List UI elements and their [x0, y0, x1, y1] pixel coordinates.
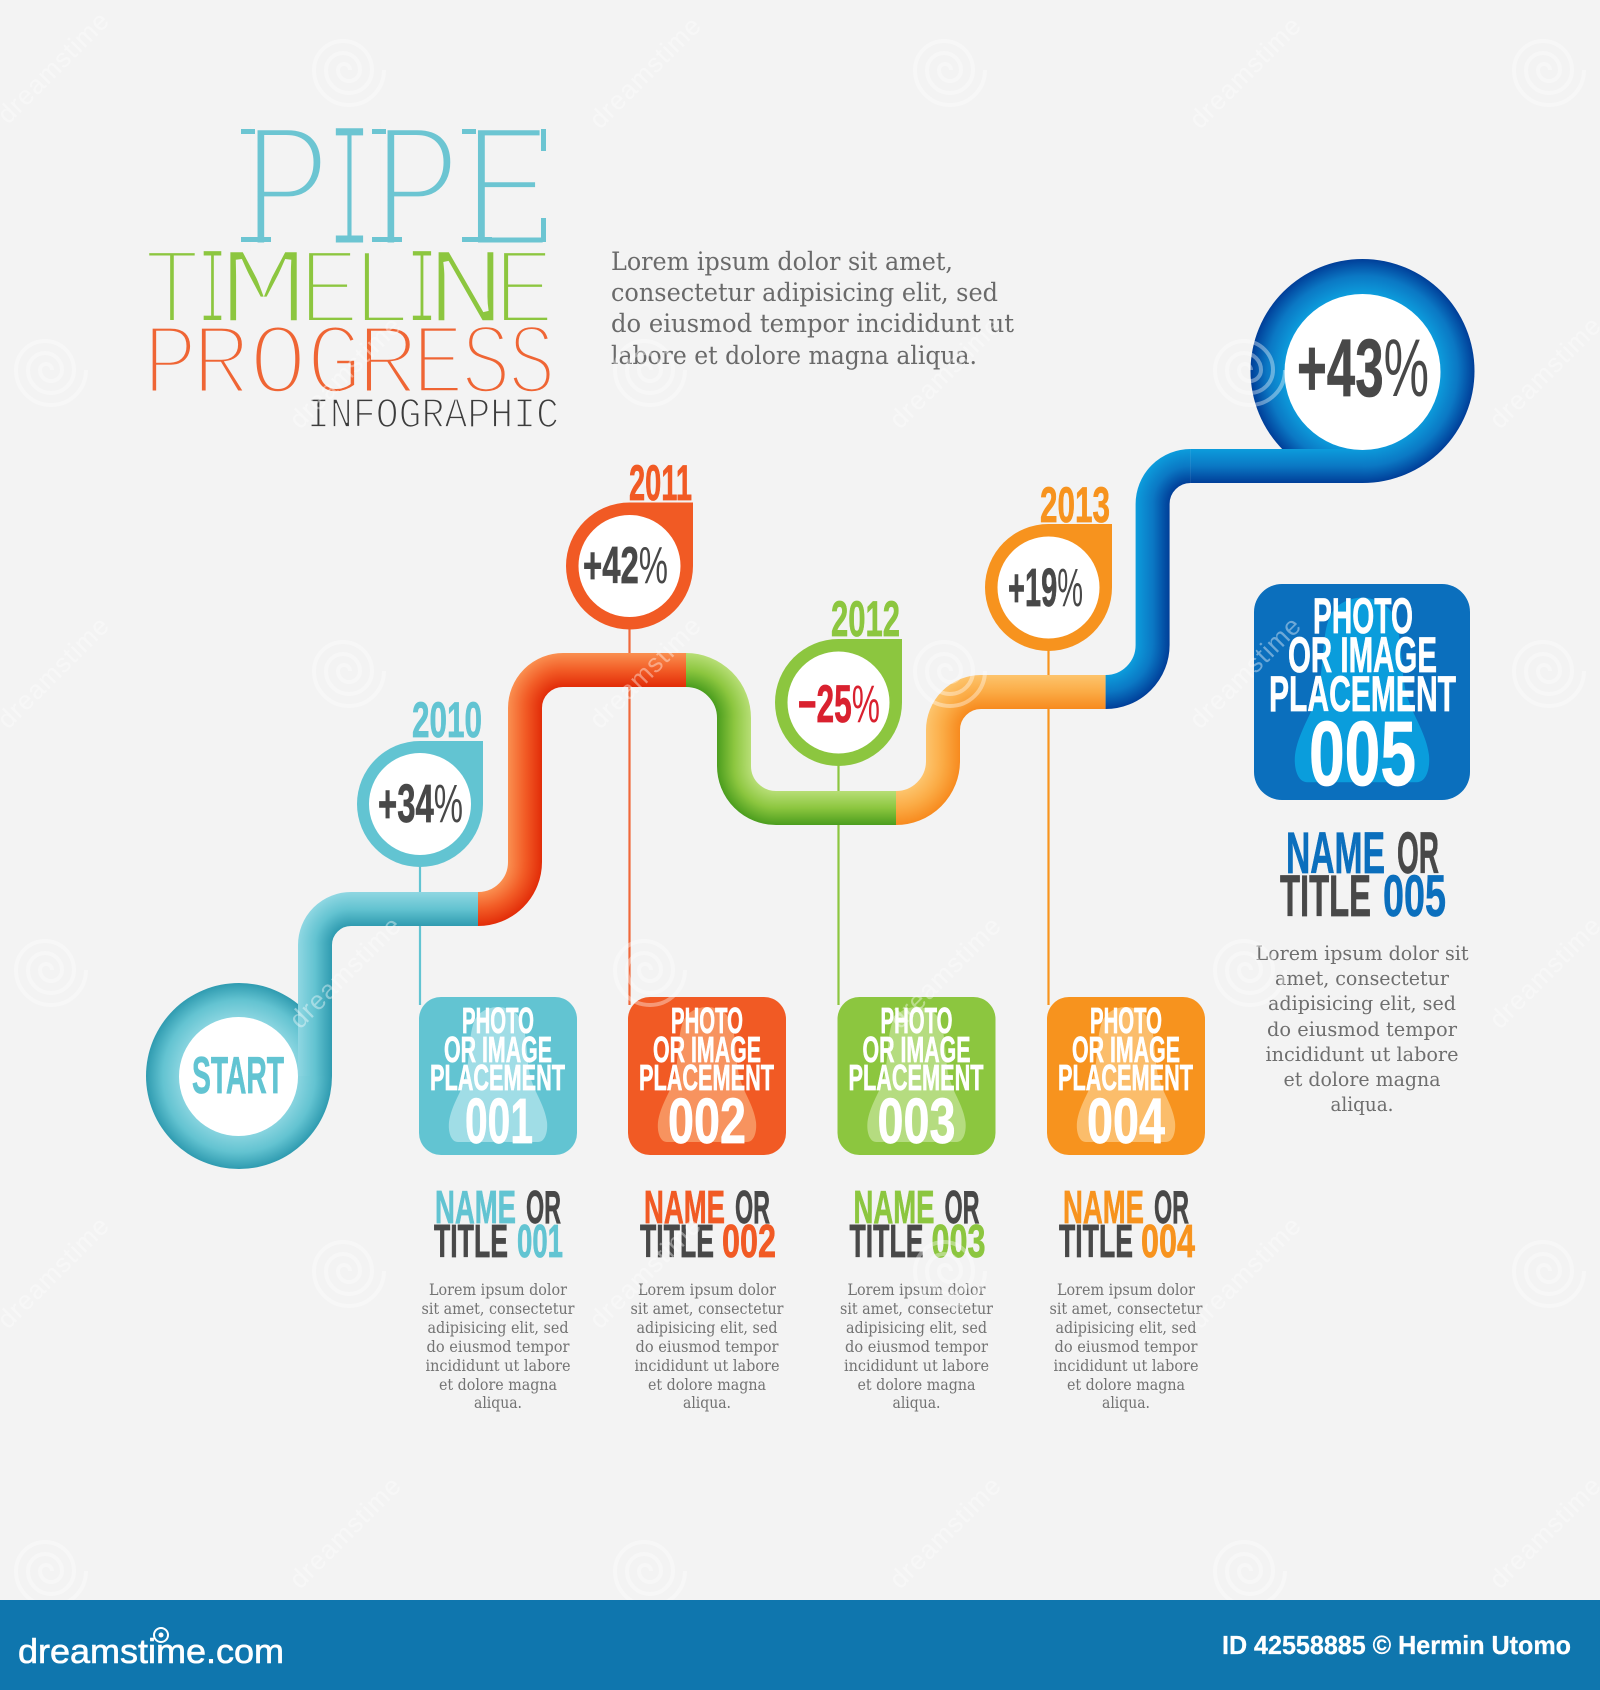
- title: PROGRESS: G: [306, 308, 363, 424]
- card 005 body text: incididunt ut labore: [1266, 1042, 1458, 1066]
- title: PROGRESS: E: [412, 308, 464, 424]
- card 004 body text: adipisicing elit, sed: [1056, 1319, 1197, 1337]
- watermark wordmarks: dreamstime: [1183, 610, 1307, 734]
- card 001: PHOTO: [462, 1000, 534, 1041]
- card 005: OR IMAGE: [1288, 627, 1437, 683]
- title: TIMELINE: N: [425, 232, 507, 356]
- card 002 body text: do eiusmod tempor: [636, 1338, 779, 1356]
- card 003: PHOTO: [880, 1000, 952, 1041]
- marker: 2010 +34%: [357, 692, 483, 867]
- title: TIMELINE: [143, 231, 556, 357]
- title: INFOGRAPHIC: INFOGRAPHIC: [307, 391, 559, 440]
- title: TIMELINE: I: [407, 231, 437, 356]
- card 001 title: [434, 1181, 563, 1267]
- marker: 2011 +42%: [566, 455, 693, 630]
- card 004 body text: do eiusmod tempor: [1054, 1338, 1198, 1356]
- card 003 title: 003: [932, 1215, 986, 1267]
- pipe: orange segment: [896, 675, 1106, 808]
- title: TIMELINE: L: [350, 232, 412, 357]
- card 002 title: TITLE: [640, 1215, 714, 1267]
- card 002 body text: adipisicing elit, sed: [636, 1319, 778, 1337]
- card 004 body text: Lorem ipsum dolor: [1057, 1281, 1196, 1299]
- title: PIPE: [241, 94, 554, 303]
- card 005 body text: amet, consectetur: [1275, 966, 1449, 990]
- pipe: red segment: [478, 653, 686, 909]
- title: PROGRESS: R: [356, 308, 418, 424]
- title: PROGRESS: [143, 308, 556, 424]
- card 003 body text: [840, 1281, 994, 1412]
- card 002 title: [640, 1181, 776, 1267]
- pipe: green segment: [686, 670, 896, 825]
- title: PIPE: P: [372, 95, 462, 303]
- watermark wordmarks: dreamstime: [283, 310, 407, 434]
- card 004 body text: sit amet, consectetur: [1050, 1300, 1203, 1318]
- footer credit: ID 42558885 © Hermin Utomo: [1222, 1630, 1571, 1660]
- marker: 2011 +42%: 2011: [629, 455, 692, 511]
- card 004: 004: [1087, 1085, 1165, 1157]
- card 005 body text: do eiusmod tempor: [1267, 1017, 1457, 1041]
- card 004: PLACEMENT: [1058, 1057, 1193, 1098]
- intro text block: do eiusmod tempor incididunt ut: [611, 309, 1014, 338]
- card 005: PLACEMENT: [1269, 666, 1456, 722]
- end node centre: +43%: [1284, 294, 1440, 450]
- card 001 title: 001: [517, 1215, 563, 1267]
- card 005 body text: [1256, 941, 1468, 1116]
- card 002 body text: et dolore magna: [648, 1376, 766, 1394]
- card 003: OR IMAGE: [862, 1029, 970, 1070]
- title: PIPE: P: [242, 95, 332, 303]
- card 001: [419, 997, 577, 1157]
- card 002: OR IMAGE: [653, 1029, 761, 1070]
- watermark wordmarks: dreamstime: [883, 1470, 1007, 1594]
- watermark wordmarks: dreamstime: [583, 610, 707, 734]
- card 001 body text: et dolore magna: [439, 1376, 557, 1394]
- start node centre: START: [192, 1047, 284, 1105]
- card 005 title: TITLE: [1280, 864, 1371, 929]
- card 005 body text: adipisicing elit, sed: [1268, 991, 1456, 1015]
- card 004 title: TITLE: [1059, 1215, 1133, 1267]
- card 002 body text: Lorem ipsum dolor: [638, 1281, 777, 1299]
- start ring: [146, 983, 332, 1169]
- card 001 body text: aliqua.: [474, 1394, 522, 1412]
- intro text block: Lorem ipsum dolor sit amet,: [611, 247, 953, 276]
- title: PROGRESS: S: [508, 308, 556, 424]
- marker: 2012 -25%: −25%: [798, 675, 880, 734]
- footer bar: [0, 1600, 1600, 1690]
- card 001 body text: adipisicing elit, sed: [428, 1319, 569, 1337]
- footer logo: dreamstime.com: [18, 1633, 284, 1671]
- title: TIMELINE: T: [143, 232, 201, 357]
- pipe: blue segment: [1106, 449, 1363, 692]
- title: PROGRESS: R: [192, 308, 250, 424]
- card 002: PHOTO: [671, 1000, 743, 1041]
- marker: 2011 +42%: +42%: [583, 537, 668, 595]
- card 003 body text: do eiusmod tempor: [845, 1338, 989, 1356]
- card 004 body text: incididunt ut labore: [1054, 1357, 1198, 1375]
- card 005: [1254, 584, 1470, 805]
- card 003 body text: Lorem ipsum dolor: [848, 1281, 986, 1299]
- card 005 body text: et dolore magna: [1284, 1067, 1441, 1091]
- card 001: OR IMAGE: [444, 1029, 552, 1070]
- card 003 body text: sit amet, consectetur: [840, 1300, 994, 1318]
- card 004 title: NAME: [1063, 1181, 1144, 1233]
- card 004 title: OR: [1154, 1181, 1189, 1233]
- marker: 2013 +19%: +19%: [1008, 558, 1083, 618]
- card 003 body text: adipisicing elit, sed: [846, 1319, 987, 1337]
- intro text block: consectetur adipisicing elit, sed: [611, 278, 998, 307]
- watermark wordmarks: dreamstime: [583, 10, 707, 134]
- card 002 body text: [630, 1281, 784, 1412]
- card 003 title: NAME: [854, 1181, 934, 1233]
- watermark wordmarks: dreamstime: [283, 1470, 407, 1594]
- intro text block: [611, 247, 1014, 370]
- marker: 2013 +19%: [985, 477, 1112, 651]
- card 003: 003: [878, 1085, 956, 1157]
- card 003 body text: incididunt ut labore: [844, 1357, 989, 1375]
- title: PROGRESS: S: [461, 308, 511, 424]
- marker: 2010 +34%: +34%: [378, 774, 463, 834]
- card 005 body text: aliqua.: [1330, 1092, 1394, 1116]
- card 005 title: NAME: [1286, 821, 1385, 886]
- marker: 2010 +34%: 2010: [412, 692, 482, 748]
- watermark wordmarks: dreamstime: [1183, 10, 1307, 134]
- card 002: [628, 997, 786, 1157]
- title: PROGRESS: O: [249, 308, 307, 424]
- card 001 title: TITLE: [434, 1215, 508, 1267]
- start node centre: [179, 1017, 298, 1136]
- card 001 body text: incididunt ut labore: [426, 1357, 570, 1375]
- title: TIMELINE: I: [198, 231, 227, 356]
- intro text block: labore et dolore magna aliqua.: [611, 341, 977, 370]
- card 002 body text: aliqua.: [683, 1394, 731, 1412]
- watermark wordmarks: dreamstime: [583, 1210, 707, 1334]
- card 002 title: OR: [735, 1181, 770, 1233]
- end node centre: +43%: +43%: [1297, 323, 1429, 414]
- card 003 title: OR: [944, 1181, 980, 1233]
- card 003: [838, 997, 996, 1157]
- card 004 title: [1059, 1181, 1195, 1267]
- end ring: [1250, 259, 1474, 483]
- title block: [143, 94, 559, 440]
- title: PIPE: E: [462, 95, 554, 303]
- card 004: PHOTO: [1090, 1000, 1162, 1041]
- card 001 body text: sit amet, consectetur: [422, 1300, 575, 1318]
- marker: 2012 -25%: 2012: [831, 591, 900, 647]
- card 001 title: OR: [526, 1181, 561, 1233]
- card 004 body text: aliqua.: [1102, 1394, 1150, 1412]
- pipe: teal segment: [298, 892, 478, 1076]
- card 002 title: NAME: [644, 1181, 725, 1233]
- card 004 body text: [1050, 1281, 1203, 1412]
- card 003 body text: aliqua.: [892, 1394, 940, 1412]
- watermark wordmarks: dreamstime: [1183, 1210, 1307, 1334]
- card 004: OR IMAGE: [1072, 1029, 1180, 1070]
- title: TIMELINE: M: [218, 232, 310, 356]
- card 001: PLACEMENT: [430, 1057, 565, 1098]
- card 001 title: NAME: [435, 1181, 516, 1233]
- card 004: [1047, 997, 1205, 1157]
- card 001 body text: [422, 1281, 575, 1412]
- card 002 title: 002: [722, 1215, 776, 1267]
- marker: 2012 -25%: [775, 591, 902, 766]
- watermark wordmarks: dreamstime: [883, 910, 1007, 1034]
- card 005 body text: Lorem ipsum dolor sit: [1256, 941, 1468, 965]
- card 004 title: 004: [1141, 1215, 1195, 1267]
- card 001: 001: [465, 1085, 533, 1157]
- watermark wordmarks: dreamstime: [283, 910, 407, 1034]
- title: TIMELINE: E: [493, 232, 556, 357]
- card 004 body text: et dolore magna: [1067, 1376, 1185, 1394]
- card 005 title: [1280, 821, 1446, 929]
- card 003 body text: et dolore magna: [858, 1376, 976, 1394]
- card 005: 005: [1309, 703, 1416, 805]
- card 003 title: TITLE: [850, 1215, 924, 1267]
- title: TIMELINE: E: [298, 232, 360, 357]
- card 002 body text: sit amet, consectetur: [630, 1300, 784, 1318]
- card 003: PLACEMENT: [848, 1057, 984, 1098]
- card 002: PLACEMENT: [639, 1057, 774, 1098]
- connector stems: [420, 620, 1048, 1005]
- watermark wordmarks: dreamstime: [883, 310, 1007, 434]
- title: PROGRESS: P: [143, 308, 197, 424]
- title: PIPE: I: [327, 94, 372, 302]
- marker: 2013 +19%: 2013: [1040, 477, 1110, 533]
- card 003 title: [850, 1181, 986, 1267]
- card 005 title: 005: [1383, 864, 1446, 929]
- card 002: 002: [668, 1085, 746, 1157]
- card 001 body text: Lorem ipsum dolor: [429, 1281, 568, 1299]
- card 005 title: OR: [1397, 821, 1439, 886]
- card 002 body text: incididunt ut labore: [634, 1357, 780, 1375]
- card 005: PHOTO: [1313, 588, 1413, 644]
- card 001 body text: do eiusmod tempor: [426, 1338, 570, 1356]
